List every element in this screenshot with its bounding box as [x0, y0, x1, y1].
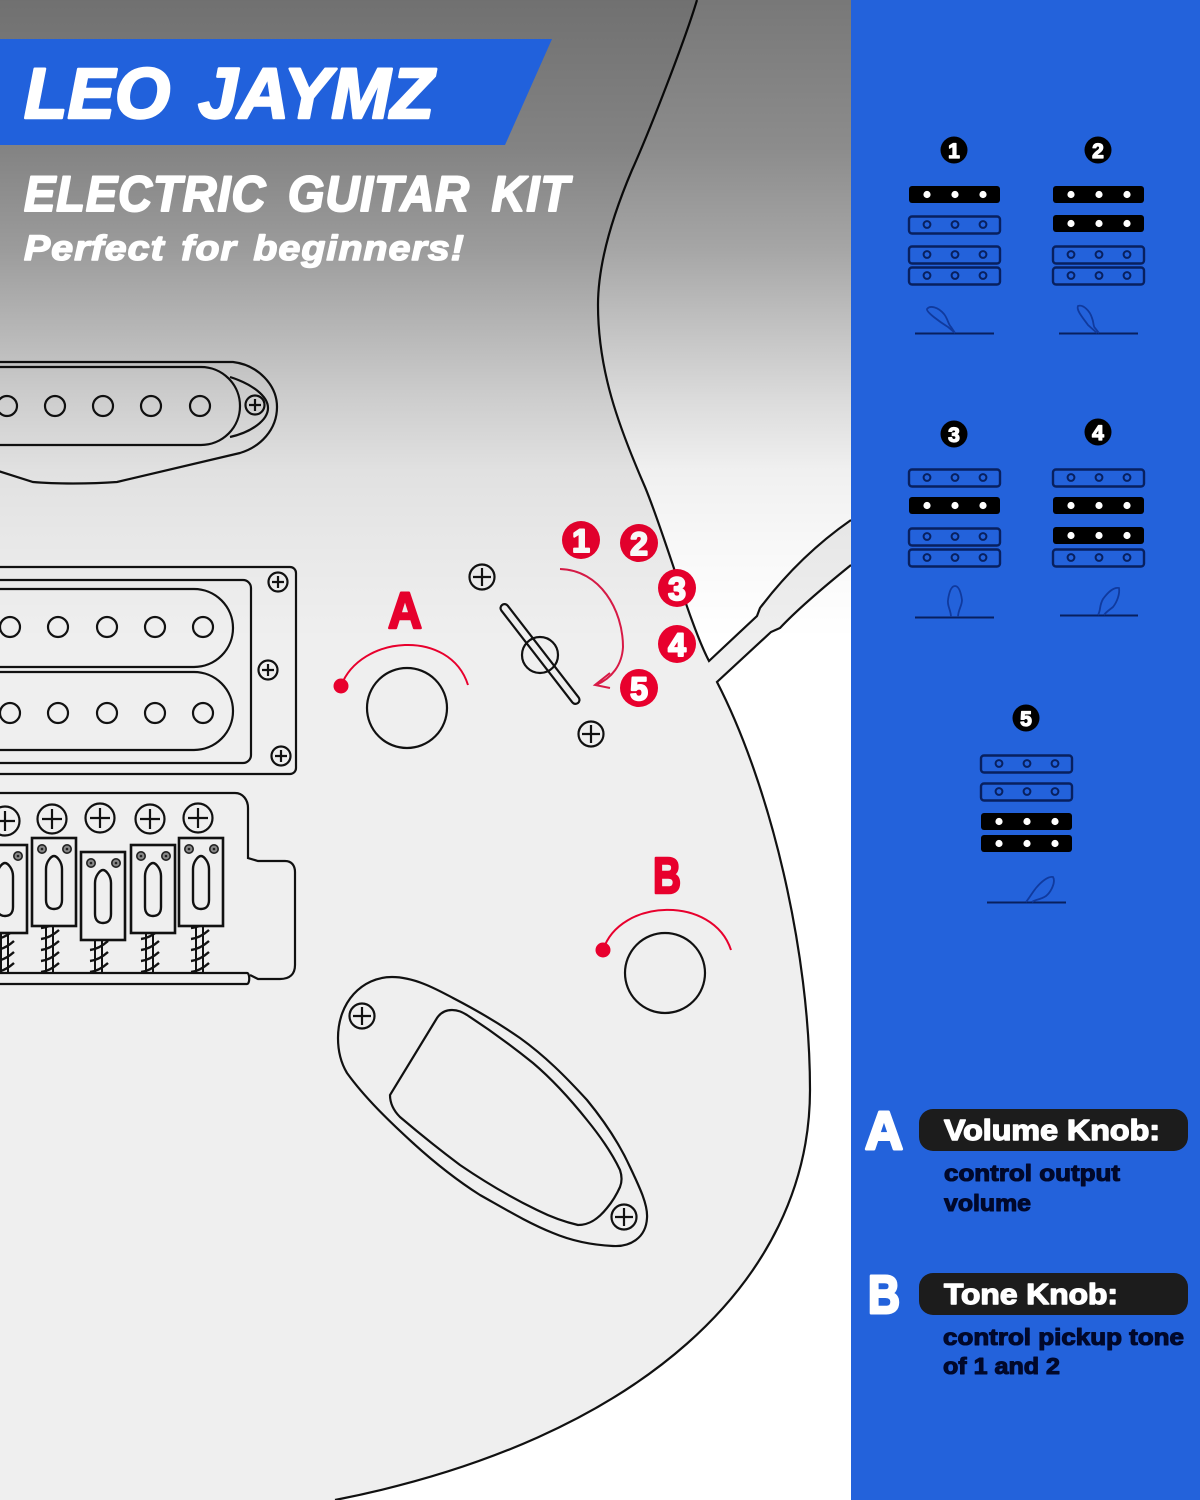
- diagram 5: 5: [1020, 708, 1032, 731]
- subtitle: [24, 166, 573, 268]
- diagram 3: 3: [948, 424, 960, 447]
- volume knob A: A: [388, 582, 422, 639]
- diagram 4: 4: [1092, 422, 1104, 445]
- diagram 2: 2: [1092, 140, 1104, 163]
- tone knob B: B: [653, 847, 681, 904]
- legend A: volume knob: volume: [944, 1190, 1031, 1216]
- position 5: [620, 669, 658, 707]
- banner: LEO JAYMZ: [24, 55, 437, 134]
- legend B: tone knob: [868, 1265, 1188, 1379]
- position 4: 4: [668, 627, 686, 663]
- diagram 5: [981, 704, 1072, 902]
- tone knob B: [596, 847, 731, 1013]
- legend A: volume knob: A: [865, 1101, 903, 1161]
- pickup selector switch: [470, 564, 604, 746]
- legend A: volume knob: [865, 1101, 1188, 1216]
- legend B: tone knob: B: [868, 1265, 900, 1325]
- position 2: 2: [630, 526, 648, 562]
- diagram 2: [1053, 136, 1144, 334]
- position 1: [562, 521, 600, 559]
- position 3: [658, 569, 696, 607]
- subtitle: ELECTRIC GUITAR KIT: [24, 166, 573, 222]
- legend A: volume knob: control output: [944, 1160, 1120, 1186]
- diagram 1: [909, 136, 1000, 334]
- position 5: 5: [630, 671, 648, 707]
- diagram 1: 1: [948, 140, 960, 163]
- diagram 4: [1053, 418, 1144, 616]
- legend B: tone knob: control pickup tone: [943, 1324, 1184, 1350]
- position 1: 1: [572, 523, 590, 559]
- blue side panel: [851, 0, 1200, 1500]
- switch positions: [560, 521, 696, 707]
- banner: [0, 39, 552, 145]
- legend B: tone knob: of 1 and 2: [943, 1353, 1060, 1379]
- diagram 3: [909, 420, 1000, 618]
- guitar body: [0, 0, 851, 1500]
- subtitle: Perfect for beginners!: [24, 229, 465, 268]
- top gradient shade: [0, 0, 851, 640]
- legend B: tone knob: Tone Knob:: [944, 1279, 1118, 1311]
- position 2: [620, 524, 658, 562]
- position 3: 3: [668, 571, 686, 607]
- middle humbucker pickup: [0, 567, 296, 774]
- neck pickup: [0, 362, 277, 484]
- volume knob A: [334, 582, 468, 748]
- bridge: [0, 793, 295, 984]
- position 4: [658, 625, 696, 663]
- background: [0, 0, 851, 1500]
- legend A: volume knob: Volume Knob:: [944, 1115, 1160, 1147]
- output jack plate: [338, 977, 647, 1246]
